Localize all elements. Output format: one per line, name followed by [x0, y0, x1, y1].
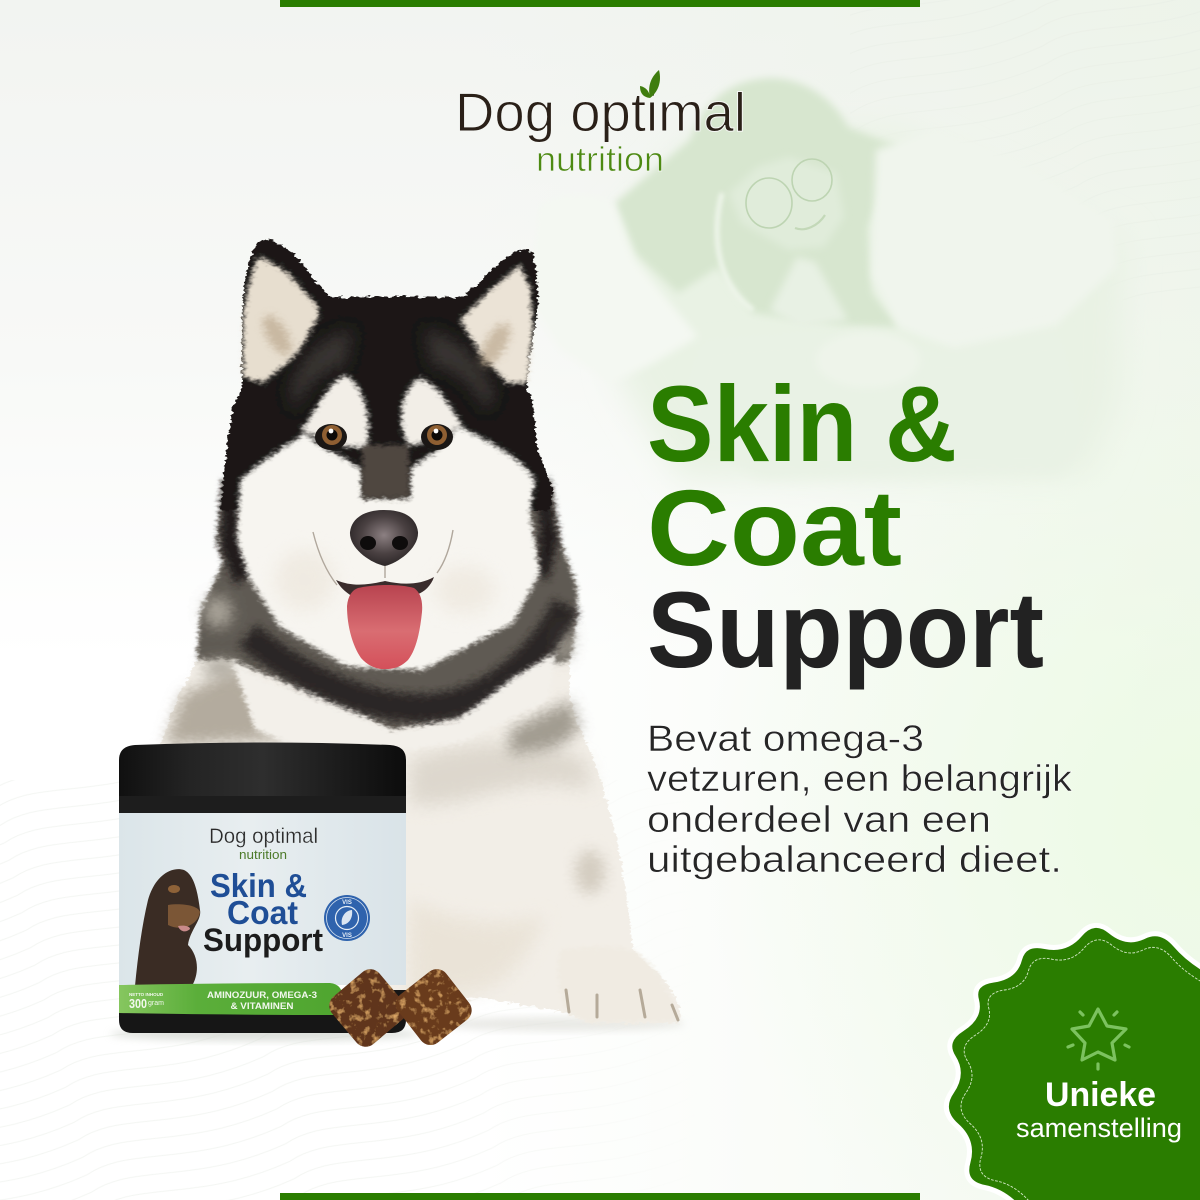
badge dashed outline — [961, 940, 1200, 1200]
woman: hair and shadow — [615, 78, 899, 327]
dog brow right — [401, 378, 462, 445]
jar net weight — [129, 992, 164, 1011]
woman: soft backdrop — [600, 130, 1125, 480]
treat left — [324, 964, 412, 1052]
dog ear right inside — [460, 265, 533, 383]
top accent bar — [280, 0, 920, 7]
description text — [647, 718, 1073, 880]
dog muzzle lines — [313, 530, 453, 585]
jar base — [119, 990, 406, 1033]
paw toe lines — [566, 990, 678, 1020]
left shoulder fur — [165, 668, 300, 745]
woman: hair strand — [717, 193, 753, 310]
dark collar band — [248, 605, 566, 708]
neck ruff — [197, 480, 577, 730]
dog eye right — [421, 424, 453, 450]
icon: fish badge — [324, 895, 370, 941]
headline — [647, 363, 1044, 690]
dog snout stripe — [362, 445, 409, 498]
headline line: Skin &: Skin & — [647, 363, 957, 484]
icon: fish badge: VIS — [342, 900, 352, 906]
dog body — [160, 480, 680, 1023]
jar net weight: 300 — [129, 996, 147, 1011]
chew treats — [324, 964, 477, 1052]
cheek warm shading — [275, 550, 495, 614]
jar label — [119, 813, 406, 985]
logo — [455, 70, 746, 179]
dog brow left — [300, 375, 369, 447]
dog paw — [558, 946, 680, 1023]
woman: hands — [816, 332, 920, 388]
badge heading: Unieke — [1045, 1076, 1156, 1114]
jar logo: nutrition — [239, 848, 287, 862]
dog tongue — [347, 585, 422, 669]
dog eye left — [315, 424, 347, 450]
dog face white mask — [237, 425, 540, 670]
woman: glasses — [746, 159, 832, 228]
jar title: Support — [203, 922, 323, 958]
woman: smile — [795, 215, 825, 229]
jar band text: AMINOZUUR, OMEGA-3 — [207, 990, 317, 1000]
icon: star — [1068, 1009, 1129, 1069]
description text: uitgebalanceerd dieet. — [647, 839, 1062, 880]
logo subtitle: nutrition — [536, 141, 664, 179]
jar lid — [119, 742, 406, 796]
headline line: Support: Support — [647, 569, 1044, 690]
ruff light patches — [202, 596, 572, 676]
dog nose — [350, 510, 418, 566]
dog mouth — [336, 577, 434, 596]
dark head-side fur — [220, 480, 558, 585]
description text: vetzuren, een belangrijk — [647, 758, 1073, 799]
ghosted photo of woman with dog — [530, 78, 1125, 480]
body shadow on floor — [435, 1017, 685, 1031]
husky dog illustration — [160, 240, 685, 1031]
bottom accent bar — [280, 1193, 920, 1200]
woman: collar — [770, 257, 848, 328]
woman: lower body — [680, 330, 1085, 478]
badge subheading: samenstelling — [1016, 1113, 1182, 1143]
woman: face — [729, 157, 844, 250]
jar net weight: NETTO INHOUD — [129, 992, 164, 997]
jar band text: & VITAMINEN — [230, 1001, 294, 1011]
icon: leaf — [640, 70, 660, 98]
jar shadow — [110, 1027, 420, 1041]
jar title: Skin & — [210, 867, 307, 904]
jar dog photo — [135, 869, 200, 986]
dog head dark fur with ears — [220, 240, 553, 510]
chest shading — [410, 743, 592, 805]
dog ear left inside — [243, 257, 320, 383]
right neck fur — [510, 700, 580, 755]
woman: sweater arm — [872, 130, 1117, 350]
description text: Bevat omega-3 — [647, 718, 924, 759]
badge shape — [946, 925, 1200, 1200]
chest fold — [410, 900, 545, 1000]
white neck band — [232, 652, 556, 750]
furry dog shape — [160, 240, 680, 1023]
jar green band — [119, 983, 343, 1015]
grey leg patch — [575, 850, 605, 894]
logo wordmark: Dog optimal — [455, 81, 746, 143]
jar logo — [209, 825, 318, 862]
woman: left pillow — [530, 195, 698, 383]
product jar — [110, 742, 420, 1041]
jar net weight: gram — [148, 1000, 164, 1007]
jar logo: Dog optimal — [209, 825, 318, 848]
jar title — [203, 867, 323, 958]
badge: unieke samenstelling — [946, 925, 1200, 1200]
jar neck — [119, 796, 406, 814]
forehead grey streaks — [290, 330, 495, 410]
icon: fish badge: VIS — [342, 933, 352, 939]
treat right — [391, 964, 477, 1050]
jar band text — [207, 990, 317, 1011]
dog ear shading — [257, 311, 516, 371]
jar title: Coat — [227, 894, 298, 931]
headline line: Coat: Coat — [647, 467, 902, 588]
description text: onderdeel van een — [647, 799, 991, 840]
